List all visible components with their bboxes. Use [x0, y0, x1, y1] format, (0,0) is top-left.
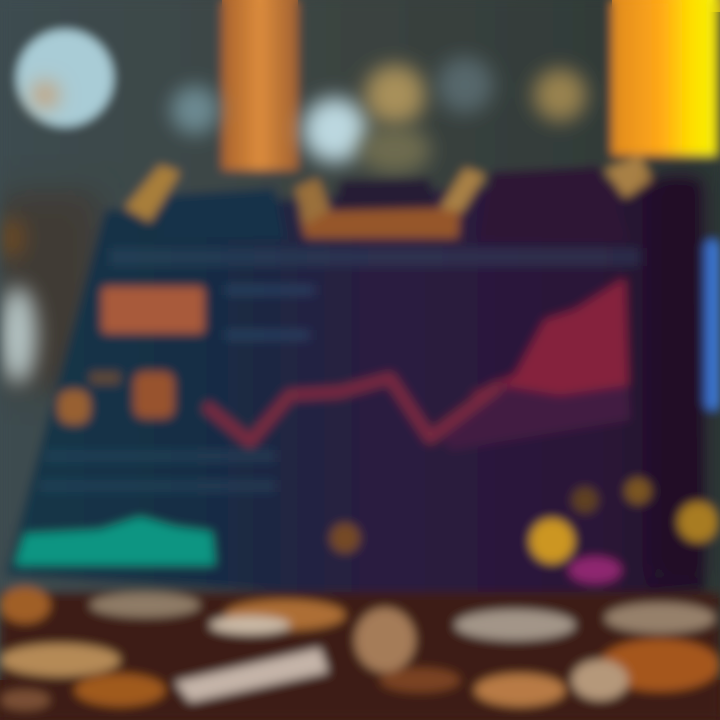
table foreground with papers	[0, 587, 720, 720]
background lights	[0, 30, 586, 383]
orange column	[222, 0, 298, 170]
panel: chart board	[5, 155, 718, 600]
teal mound	[15, 517, 215, 565]
line chart	[205, 378, 500, 442]
dark right side	[655, 178, 700, 578]
orange column top edge	[222, 0, 298, 12]
table edge underlay	[0, 680, 720, 720]
blue glow at right edge	[704, 240, 720, 410]
area chart: red rise	[470, 278, 628, 405]
dim wall patch	[0, 190, 100, 390]
text lines	[225, 285, 315, 340]
top edge tabs	[125, 155, 652, 240]
header row of board	[110, 248, 640, 266]
light: pale blue globe	[17, 30, 113, 126]
area chart shadow	[440, 385, 630, 450]
coins	[330, 478, 718, 563]
yellow column	[612, 0, 720, 155]
small orange figures	[58, 372, 174, 424]
magenta accent	[569, 557, 621, 583]
orange title block	[102, 287, 204, 333]
lower data rows	[40, 450, 275, 492]
yellow column top edge	[612, 0, 720, 12]
